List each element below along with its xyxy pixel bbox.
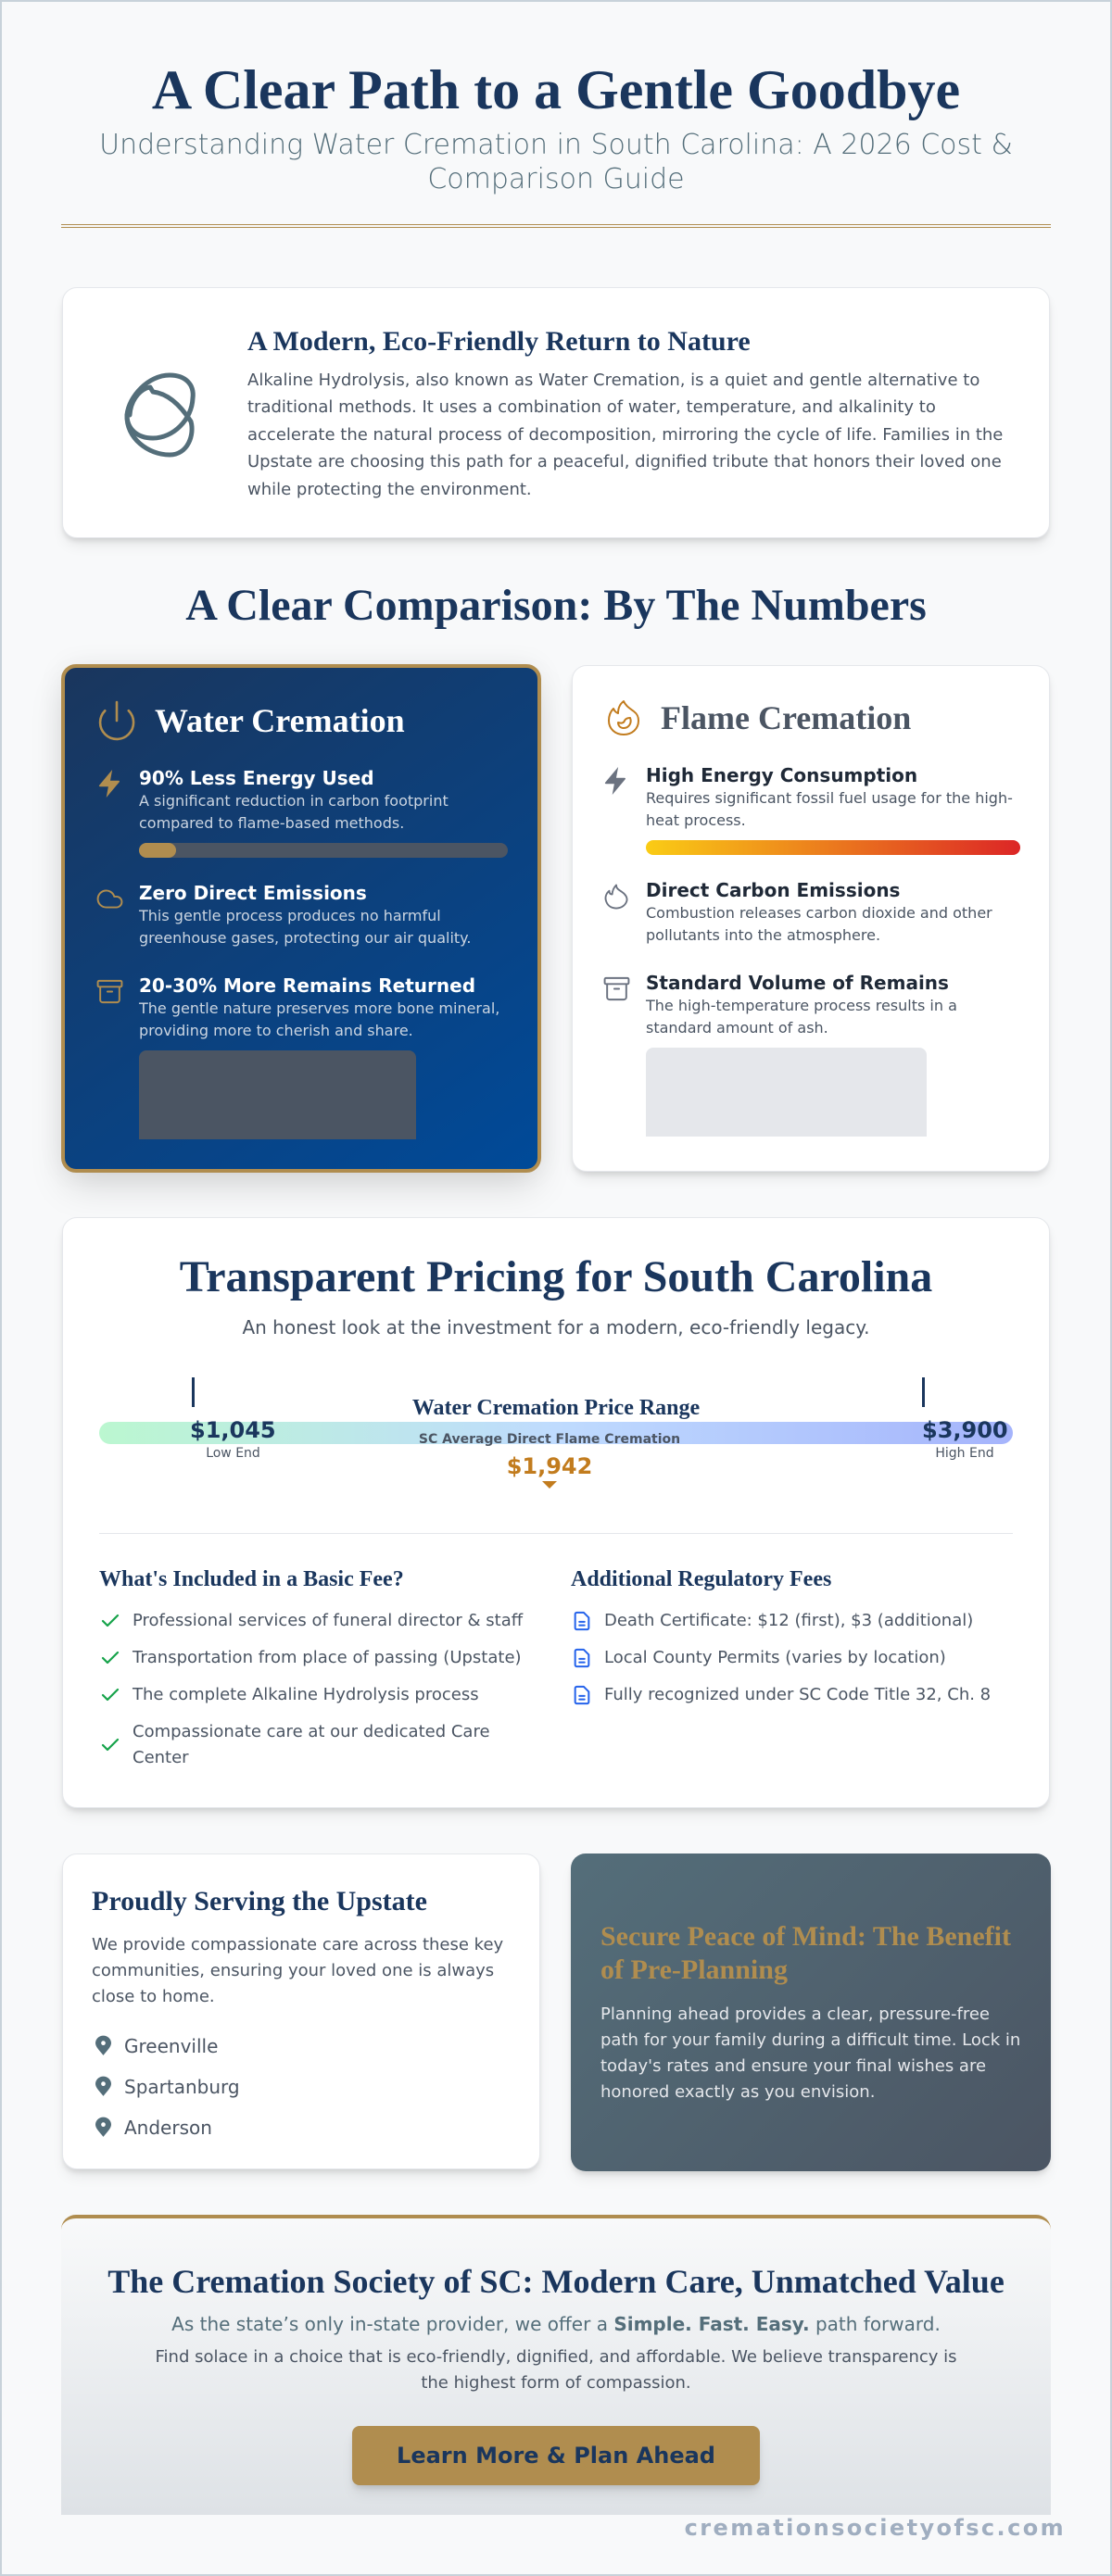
item: energy (604, 764, 1020, 855)
intro text: Upstate are choosing this path for a peaceful, dignified tribute that honors their loved one (247, 452, 1002, 471)
remains text (139, 999, 499, 1039)
average marker (542, 1481, 557, 1489)
cta tagline: As the state’s only in-state provider, we offer a Simple. Fast. Easy. path forward. (171, 2313, 941, 2335)
cta heading: The Cremation Society of SC: Modern Care, Unmatched Value (107, 2263, 1005, 2300)
item text: Center (133, 1748, 189, 1767)
pre-planning text: today's rates and ensure your final wishes are (600, 2056, 986, 2076)
service text: communities, ensuring your loved one is always (92, 1961, 494, 1980)
emissions heading: Direct Carbon Emissions (646, 879, 900, 901)
intro text: while protecting the environment. (247, 480, 532, 499)
included item (102, 1611, 523, 1630)
item text: Death Certificate: $12 (first), $3 (additional) (604, 1611, 973, 1630)
icon: intertwined circles (124, 372, 196, 458)
subtitle: Understanding Water Cremation in South Carolina: A 2026 Cost & (99, 129, 1013, 161)
intro heading: A Modern, Eco-Friendly Return to Nature (247, 326, 751, 357)
water heading: Water Cremation (155, 702, 405, 739)
included item (102, 1685, 479, 1704)
emissions text: Combustion releases carbon dioxide and other (646, 904, 992, 922)
included item (102, 1648, 522, 1667)
list: regulatory fees (571, 1567, 991, 1704)
emissions text: This gentle process produces no harmful (139, 907, 441, 924)
item text: Compassionate care at our dedicated Care (133, 1722, 490, 1741)
emissions heading: Zero Direct Emissions (139, 882, 367, 904)
energy heading: High Energy Consumption (646, 764, 917, 786)
high tick (922, 1377, 925, 1407)
list: included (99, 1567, 523, 1767)
icon: archive (604, 976, 630, 1000)
intro text (247, 371, 1003, 499)
energy bar fill (139, 843, 176, 858)
panel: intro (62, 287, 1050, 538)
price range chart (99, 1377, 1013, 1489)
footer url: cremationsocietyofsc.com (685, 2515, 1066, 2541)
low price: $1,045 (190, 1417, 276, 1443)
item text: Local County Permits (varies by location) (604, 1648, 946, 1667)
item text: Fully recognized under SC Code Title 32, Ch. 8 (604, 1685, 991, 1704)
range label: Water Cremation Price Range (412, 1396, 700, 1420)
place name: Anderson (124, 2116, 212, 2138)
fee item (575, 1611, 973, 1630)
energy text (646, 789, 1013, 829)
icon: check (102, 1738, 119, 1751)
energy text: A significant reduction in carbon footprint (139, 792, 449, 810)
remains heading: Standard Volume of Remains (646, 972, 949, 994)
divider (99, 1533, 1013, 1534)
average label: SC Average Direct Flame Cremation (419, 1432, 680, 1447)
remains placeholder (139, 1050, 416, 1139)
icon: check (102, 1688, 119, 1701)
pricing subheading: An honest look at the investment for a modern, eco-friendly legacy. (242, 1316, 870, 1338)
cta text (61, 2344, 1051, 2396)
included heading: What's Included in a Basic Fee? (99, 1567, 404, 1591)
item text: The complete Alkaline Hydrolysis process (133, 1685, 479, 1704)
service heading: Proudly Serving the Upstate (92, 1886, 427, 1916)
item text (133, 1722, 490, 1767)
section heading: comparison: A Clear Comparison: By The Numbers (185, 581, 927, 630)
energy heading: 90% Less Energy Used (139, 767, 374, 789)
energy text: compared to flame-based methods. (139, 814, 404, 832)
cta text: Find solace in a choice that is eco-friendly, dignified, and affordable. We believe transparency is (155, 2347, 957, 2367)
emissions text (139, 907, 471, 947)
icon: cloud (96, 889, 122, 908)
item: remains (604, 972, 957, 1137)
high price: $3,900 (922, 1417, 1008, 1443)
pre-planning text (600, 2002, 1020, 2105)
place name: Spartanburg (124, 2075, 240, 2097)
pricing heading: Transparent Pricing for South Carolina (180, 1252, 932, 1301)
energy bar (646, 840, 1020, 855)
item: remains (96, 974, 499, 1139)
intro text: traditional methods. It uses a combination of water, temperature, and alkalinity to (247, 397, 936, 417)
energy text (139, 792, 449, 832)
icon: flame outline (604, 884, 628, 910)
energy text: Requires significant fossil fuel usage for the high- (646, 789, 1013, 807)
cta button: Learn More & Plan Ahead (397, 2443, 715, 2469)
pre-planning text: Planning ahead provides a clear, pressure-free (600, 2004, 990, 2024)
pre-planning heading: Secure Peace of Mind: The Benefit (600, 1921, 1011, 1952)
icon: document (572, 1685, 592, 1705)
icon: check (102, 1651, 119, 1664)
icon: document (575, 1649, 589, 1667)
panel: pre-planning (571, 1853, 1051, 2171)
service text: We provide compassionate care across these key (92, 1935, 503, 1954)
low label: Low End (206, 1446, 260, 1461)
emissions text: greenhouse gases, protecting our air quality. (139, 929, 471, 947)
cta text: the highest form of compassion. (421, 2373, 691, 2393)
icon: archive (96, 980, 122, 1004)
energy bar (139, 843, 508, 858)
flame heading: Flame Cremation (661, 699, 911, 736)
pre-planning text: path for your family during a difficult time. Lock in (600, 2030, 1020, 2050)
icon: check (102, 1614, 119, 1627)
icon: document (575, 1612, 589, 1630)
place name: Greenville (124, 2034, 218, 2056)
item text: Professional services of funeral director & staff (133, 1611, 523, 1630)
panel: service area (62, 1853, 540, 2169)
remains text: standard amount of ash. (646, 1019, 828, 1037)
pre-planning heading (600, 1920, 1011, 1987)
fees heading: Additional Regulatory Fees (571, 1567, 831, 1591)
icon: pin (95, 2077, 111, 2095)
remains text: The high-temperature process results in a (646, 997, 957, 1014)
location: Spartanburg (92, 2073, 370, 2101)
icon: bolt (604, 767, 626, 795)
item: energy (98, 767, 508, 858)
cta button (352, 2426, 760, 2485)
panel: pricing (62, 1217, 1050, 1808)
emissions text: pollutants into the atmosphere. (646, 926, 880, 944)
subtitle (99, 129, 1013, 195)
item text: Transportation from place of passing (Upstate) (133, 1648, 522, 1667)
title: A Clear Path to a Gentle Goodbye (152, 59, 960, 120)
icon: pin (95, 2036, 111, 2055)
pre-planning text: honored exactly as you envision. (600, 2082, 875, 2102)
range bar (99, 1422, 1013, 1444)
emissions text (646, 904, 992, 944)
high label: High End (935, 1446, 994, 1461)
panel: flame cremation (572, 665, 1050, 1172)
remains text (645, 997, 957, 1037)
included item (102, 1722, 490, 1767)
icon: bolt (98, 770, 120, 798)
remains heading: 20-30% More Remains Returned (139, 974, 475, 997)
subtitle: Comparison Guide (427, 163, 685, 195)
fee item (575, 1685, 991, 1704)
location: Greenville (92, 2032, 370, 2060)
energy text: heat process. (646, 811, 746, 829)
panel: water cremation (61, 664, 541, 1173)
fee item (575, 1648, 946, 1667)
low tick (192, 1377, 195, 1407)
service text: close to home. (92, 1987, 215, 2006)
header (61, 56, 1051, 228)
panel: call to action (61, 2215, 1051, 2515)
intro text: Alkaline Hydrolysis, also known as Water Cremation, is a quiet and gentle alternative to (247, 371, 979, 390)
intro text: accelerate the natural process of decomposition, mirroring the cycle of life. Families in the (247, 425, 1003, 445)
remains text: providing more to cherish and share. (139, 1022, 413, 1039)
remains placeholder (646, 1048, 927, 1137)
service text (92, 1932, 503, 2010)
location: Anderson (92, 2114, 370, 2142)
icon: pin (95, 2117, 111, 2136)
average price: $1,942 (507, 1453, 592, 1479)
item: emissions (604, 879, 992, 944)
pre-planning heading: of Pre-Planning (600, 1954, 788, 1985)
remains text: The gentle nature preserves more bone mineral, (139, 999, 499, 1017)
icon: flame (608, 700, 639, 735)
item: emissions (96, 882, 471, 947)
icon: power (98, 700, 135, 741)
